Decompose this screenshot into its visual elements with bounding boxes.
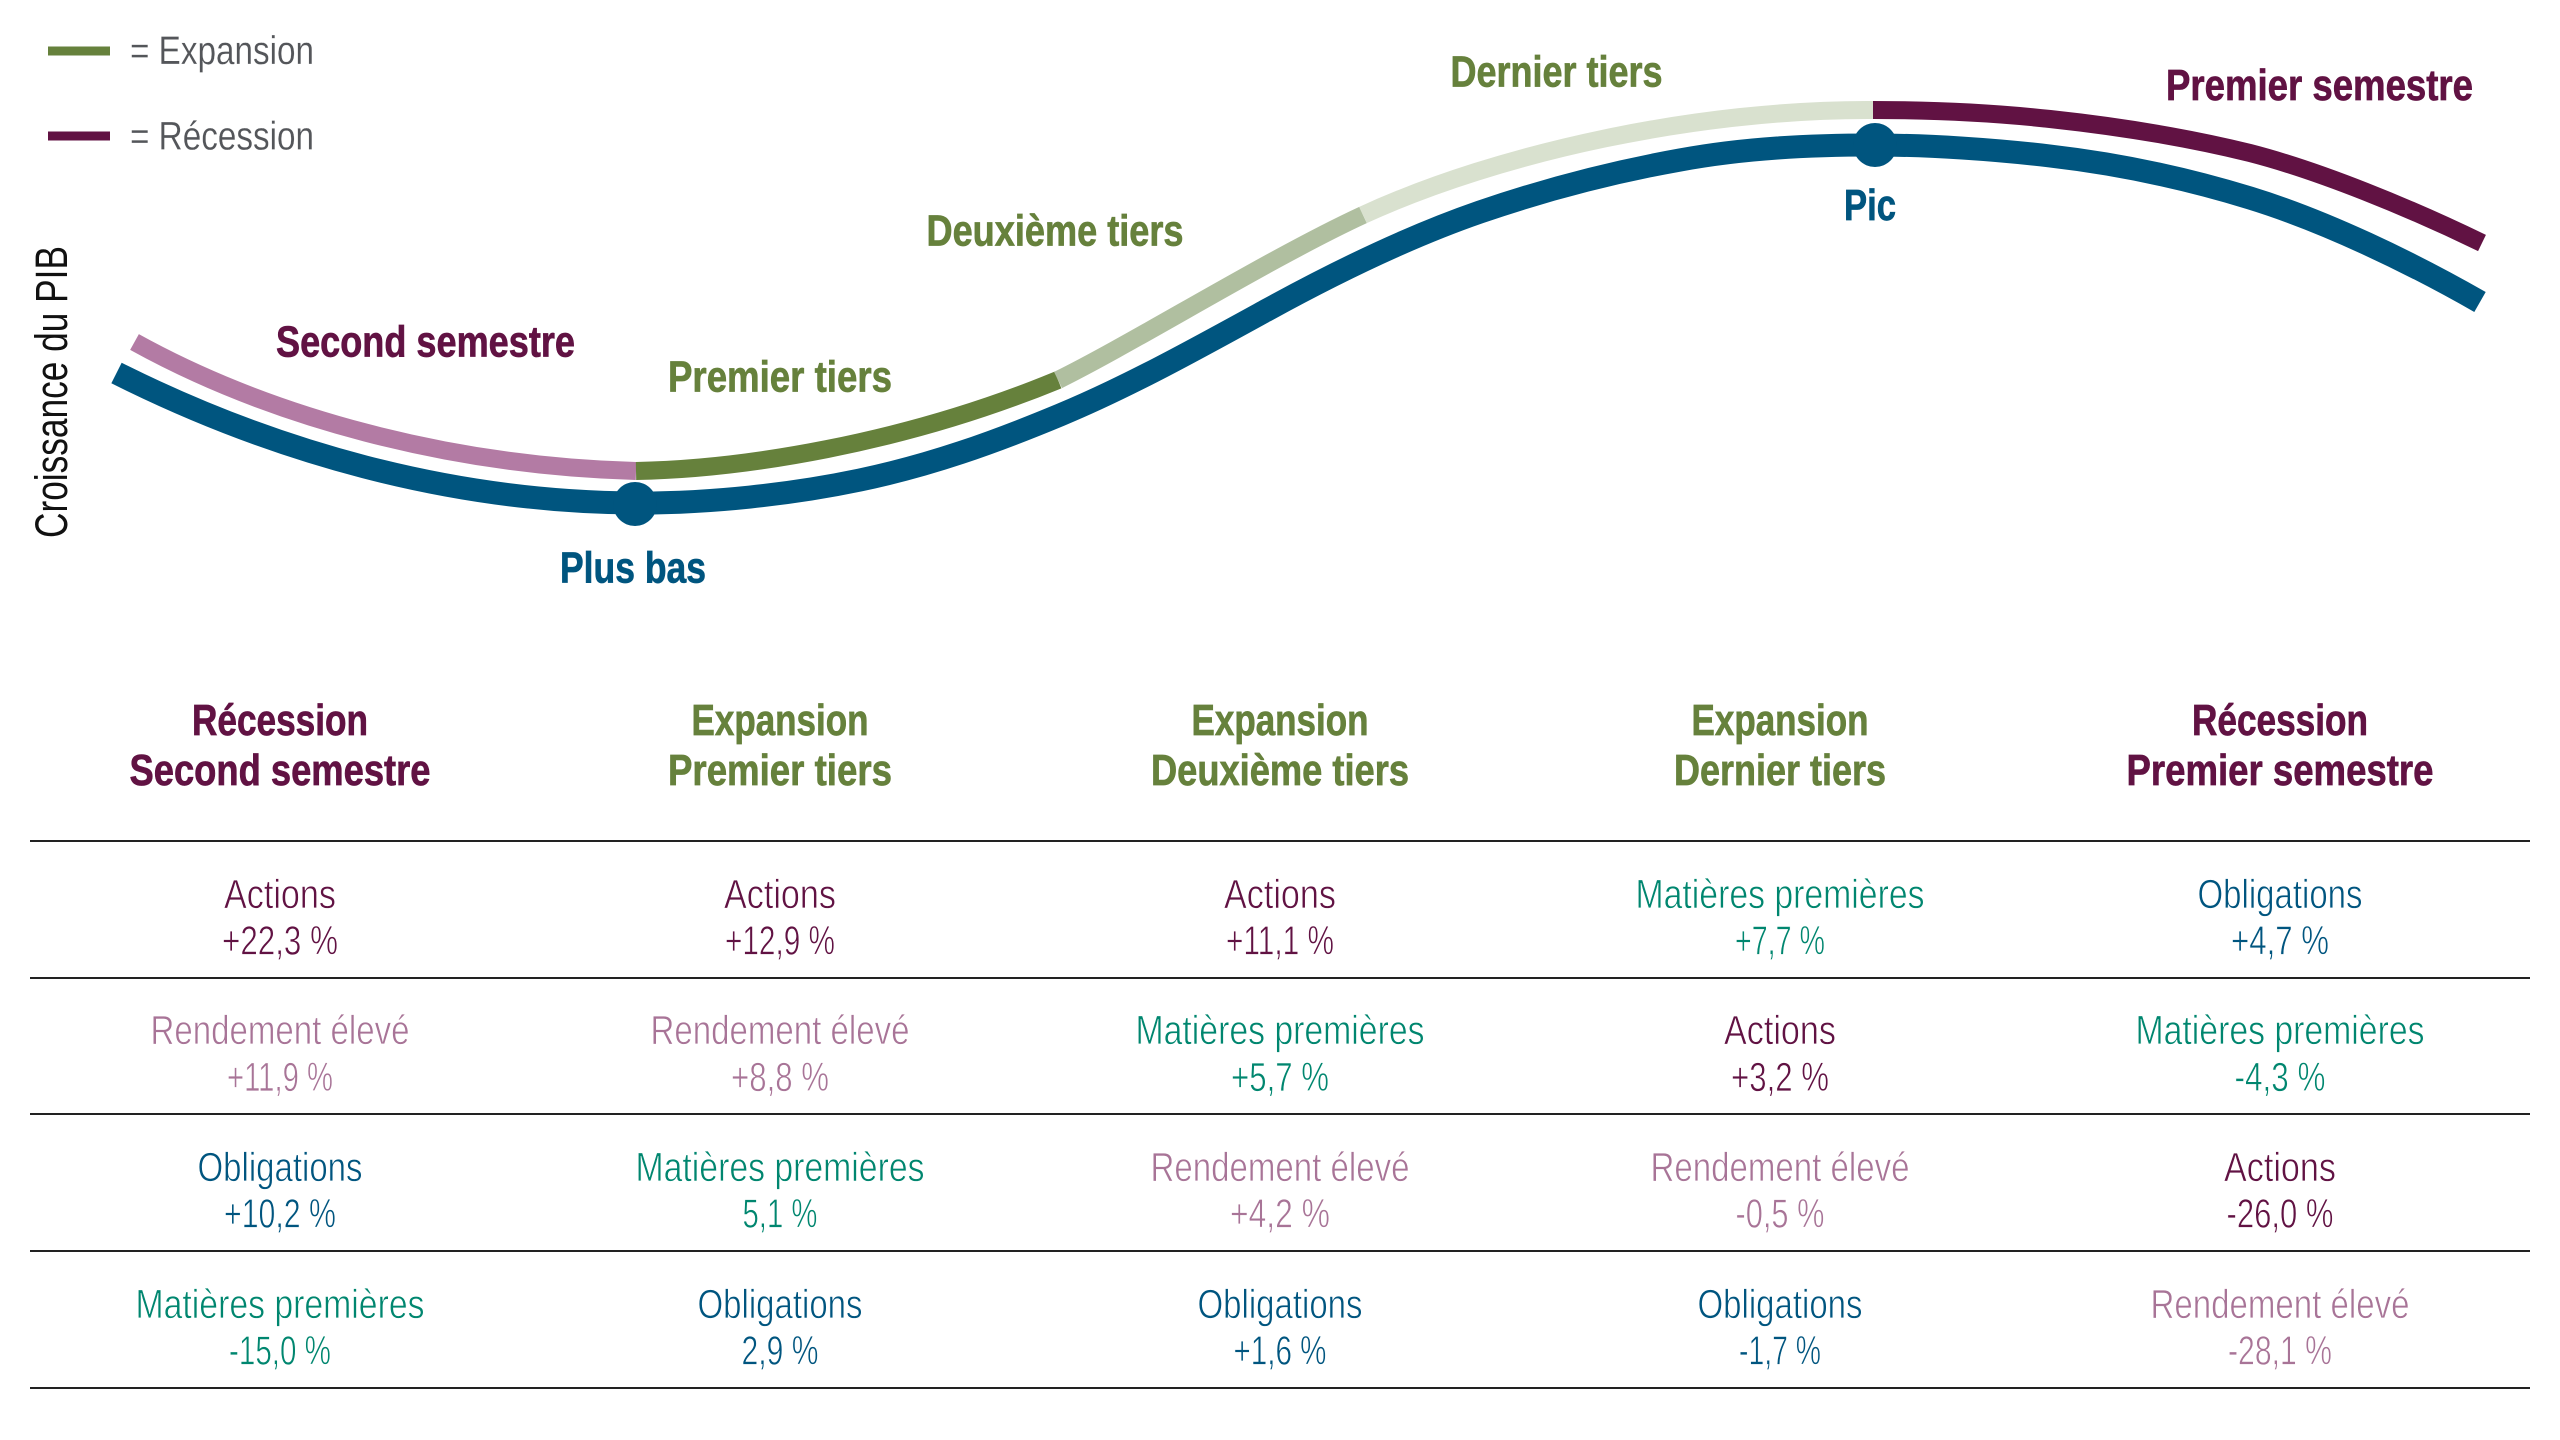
cell: actions: +3,2 %	[1731, 1054, 1829, 1100]
table rules	[30, 841, 2530, 1388]
segment: premier tiers expansion	[636, 380, 1058, 471]
cell: matieres premieres: Matières premières	[1136, 1007, 1424, 1053]
column heading	[2126, 696, 2434, 795]
cell: actions: Actions	[724, 871, 836, 917]
cell: obligations	[698, 1281, 862, 1374]
chart: business cycle curve	[116, 110, 2482, 526]
legend: recession: = Récession	[130, 114, 314, 158]
column heading: Récession	[192, 696, 368, 745]
cell: rendement eleve	[150, 1007, 410, 1100]
cell: rendement eleve: Rendement élevé	[650, 1007, 910, 1053]
curve label: dernier tiers: Dernier tiers	[1450, 48, 1662, 96]
curve label: plus bas: Plus bas	[560, 544, 706, 592]
cell: matieres premieres: 5,1 %	[742, 1190, 818, 1236]
legend: recession	[48, 114, 314, 158]
cell: actions: Actions	[1724, 1007, 1836, 1053]
cell: matieres premieres	[636, 1144, 924, 1236]
segment: dernier tiers expansion	[1363, 110, 1873, 215]
column: recession second semestre	[130, 696, 430, 1374]
column heading	[668, 696, 892, 795]
cell: matieres premieres: Matières premières	[136, 1281, 424, 1327]
cell: obligations: -1,7 %	[1739, 1328, 1821, 1374]
cell: rendement eleve	[650, 1007, 910, 1100]
cell: matieres premieres: +5,7 %	[1231, 1054, 1329, 1100]
cell: matieres premieres	[2136, 1007, 2424, 1100]
cell: actions	[222, 871, 338, 964]
column heading: Second semestre	[130, 746, 430, 795]
cell: rendement eleve: Rendement élevé	[1150, 1144, 1410, 1190]
cell: rendement eleve: -28,1 %	[2228, 1328, 2332, 1374]
segment: second semestre recession	[134, 342, 636, 471]
blue GDP growth curve	[116, 145, 2480, 503]
marker: trough	[613, 482, 657, 526]
cell: rendement eleve: +4,2 %	[1230, 1190, 1330, 1236]
cell: obligations: Obligations	[1698, 1281, 1862, 1327]
cell: obligations: 2,9 %	[742, 1328, 818, 1374]
curve label: premier tiers: Premier tiers	[668, 352, 892, 402]
legend: expansion	[48, 29, 314, 73]
column heading: Deuxième tiers	[1151, 746, 1409, 795]
curve label: pic: Pic	[1844, 181, 1896, 230]
cell: actions: Actions	[224, 871, 336, 917]
curve label: second semestre: Second semestre	[276, 318, 575, 366]
cell: obligations: +10,2 %	[224, 1190, 336, 1236]
cell: rendement eleve: -0,5 %	[1736, 1190, 1824, 1236]
curve label: premier semestre: Premier semestre	[2166, 61, 2473, 110]
cell: matieres premieres	[1636, 871, 1924, 964]
cell: rendement eleve: +8,8 %	[731, 1054, 829, 1100]
cell: actions	[1724, 1007, 1836, 1100]
cell: rendement eleve: Rendement élevé	[2150, 1281, 2410, 1327]
cell: obligations: Obligations	[2198, 871, 2362, 917]
cell: actions: -26,0 %	[2226, 1190, 2334, 1236]
column heading	[1151, 696, 1409, 795]
cell: matieres premieres	[1136, 1007, 1424, 1100]
cell: actions: Actions	[2224, 1144, 2336, 1190]
cell: matieres premieres: +7,7 %	[1735, 918, 1825, 964]
column heading: Expansion	[1192, 696, 1368, 745]
column heading	[130, 696, 430, 795]
curve label: deuxieme tiers: Deuxième tiers	[926, 206, 1184, 256]
legend: expansion: = Expansion	[130, 29, 314, 73]
cell: rendement eleve: Rendement élevé	[150, 1007, 410, 1053]
cell: rendement eleve: +11,9 %	[227, 1054, 333, 1100]
cell: rendement eleve	[2150, 1281, 2410, 1374]
column heading	[1674, 696, 1886, 795]
cell: obligations	[1198, 1281, 1362, 1374]
cell: actions: +12,9 %	[725, 918, 835, 964]
column: expansion premier tiers	[636, 696, 924, 1374]
cell: obligations: Obligations	[1198, 1281, 1362, 1327]
cell: actions: +22,3 %	[222, 918, 338, 964]
column heading: Premier semestre	[2126, 746, 2434, 795]
cell: obligations	[198, 1144, 362, 1236]
cell: rendement eleve	[1650, 1144, 1910, 1236]
segment: premier semestre recession	[1873, 110, 2482, 243]
cell: obligations	[2198, 871, 2362, 964]
cell: actions	[724, 871, 836, 964]
cell: obligations: +1,6 %	[1234, 1328, 1326, 1374]
cell: matieres premieres: Matières premières	[1636, 871, 1924, 917]
column: expansion deuxieme tiers	[1136, 696, 1424, 1374]
column heading: Récession	[2192, 696, 2368, 745]
column heading: Premier tiers	[668, 746, 892, 795]
segment: deuxieme tiers expansion	[1058, 215, 1363, 380]
cell: obligations: Obligations	[198, 1144, 362, 1190]
column: expansion dernier tiers	[1636, 696, 1924, 1374]
cell: matieres premieres: -4,3 %	[2234, 1054, 2326, 1100]
column: recession premier semestre	[2126, 696, 2434, 1374]
cell: matieres premieres: -15,0 %	[229, 1328, 331, 1374]
legend	[48, 29, 314, 158]
cell: matieres premieres: Matières premières	[636, 1144, 924, 1190]
cell: matieres premieres	[136, 1281, 424, 1374]
column heading: Dernier tiers	[1674, 746, 1886, 795]
column heading: Expansion	[692, 696, 868, 745]
cell: obligations	[1698, 1281, 1862, 1374]
cell: actions	[2224, 1144, 2336, 1236]
cell: matieres premieres: Matières premières	[2136, 1007, 2424, 1053]
cell: actions: +11,1 %	[1226, 918, 1334, 964]
cell: obligations: +4,7 %	[2231, 918, 2329, 964]
cell: actions	[1224, 871, 1336, 964]
cell: rendement eleve	[1150, 1144, 1410, 1236]
cell: actions: Actions	[1224, 871, 1336, 917]
cell: obligations: Obligations	[698, 1281, 862, 1327]
column heading: Expansion	[1692, 696, 1868, 745]
y axis label: Croissance du PIB	[26, 246, 77, 538]
cell: rendement eleve: Rendement élevé	[1650, 1144, 1910, 1190]
marker: peak	[1853, 123, 1897, 167]
